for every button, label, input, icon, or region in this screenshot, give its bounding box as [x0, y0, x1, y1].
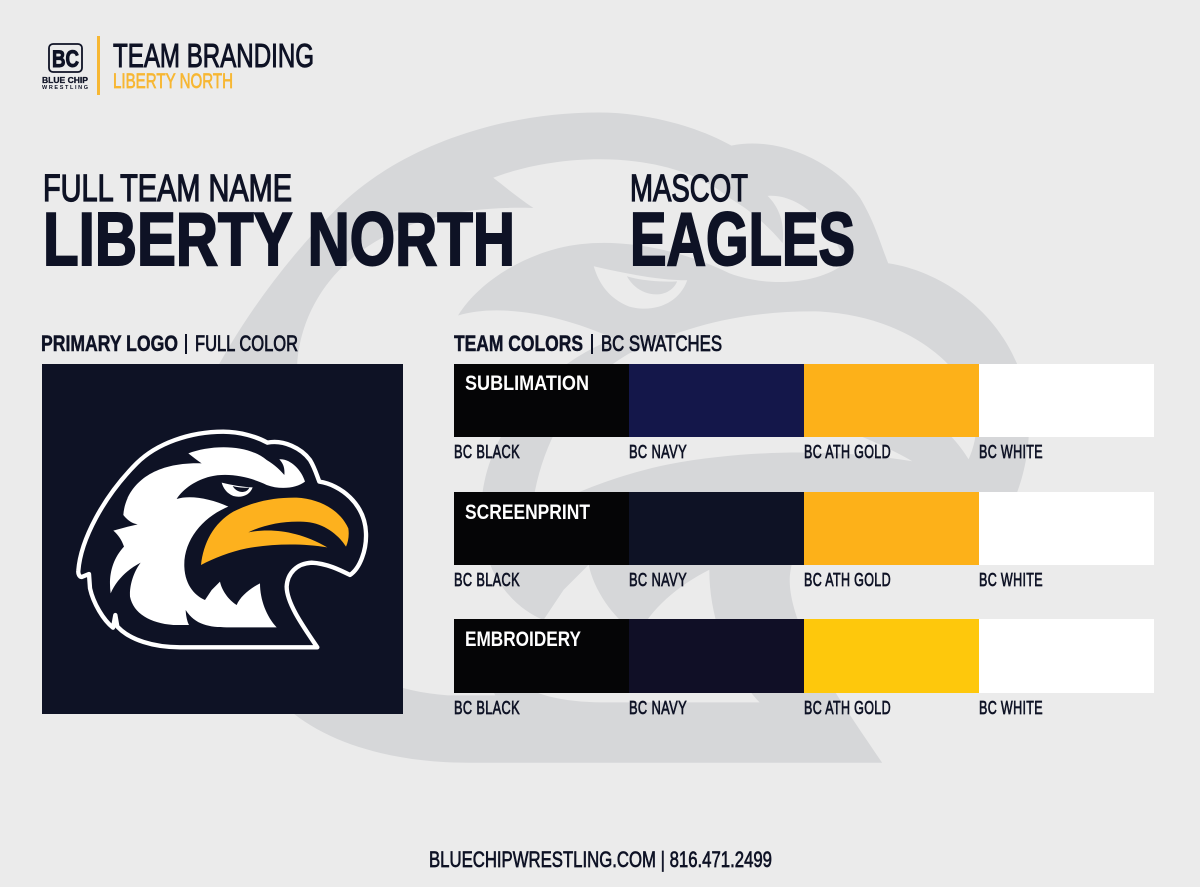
mascot value: EAGLES [630, 197, 855, 281]
primary logo heading [41, 331, 298, 356]
panel: screenprint swatches: BC BLACK [454, 570, 520, 590]
primary logo heading: FULL COLOR [195, 331, 298, 356]
team colors heading: TEAM COLORS [454, 331, 583, 356]
panel: embroidery swatches: BC BLACK [454, 698, 520, 718]
team colors heading [454, 331, 722, 356]
header: Blue Chip Wrestling logo: WRESTLING [42, 85, 88, 91]
panel: screenprint swatches: BC WHITE [979, 570, 1043, 590]
panel: screenprint swatches: BC ATH GOLD [804, 570, 891, 590]
panel: sublimation swatches: SUBLIMATION [465, 372, 589, 395]
panel: embroidery swatches: BC WHITE [979, 698, 1043, 718]
panel: sublimation swatches: BC BLACK [454, 442, 520, 462]
header: Blue Chip Wrestling logo: BC [52, 46, 79, 73]
panel: embroidery swatches: BC ATH GOLD [804, 698, 891, 718]
header: Blue Chip Wrestling logo: BLUE CHIP [42, 75, 88, 85]
primary logo heading: PRIMARY LOGO [41, 331, 178, 356]
full team name label: FULL TEAM NAME [43, 168, 292, 210]
panel: screenprint swatches [454, 492, 1154, 590]
panel: sublimation swatches: BC NAVY [629, 442, 687, 462]
watermark: eagle head [161, 112, 1029, 763]
footer contact line: BLUECHIPWRESTLING.COM | 816.471.2499 [429, 847, 772, 872]
header: Blue Chip Wrestling logo [42, 44, 88, 91]
header divider [97, 36, 100, 95]
mascot label: MASCOT [630, 168, 748, 210]
panel: embroidery swatches: EMBROIDERY [465, 628, 581, 651]
panel: sublimation swatches: BC WHITE [979, 442, 1043, 462]
panel: sublimation swatches: BC ATH GOLD [804, 442, 891, 462]
header subtitle: LIBERTY NORTH [113, 70, 233, 93]
panel: screenprint swatches: BC NAVY [629, 570, 687, 590]
panel: embroidery swatches: BC NAVY [629, 698, 687, 718]
team colors heading: BC SWATCHES [601, 331, 722, 356]
full team name value: LIBERTY NORTH [43, 197, 515, 281]
header title: TEAM BRANDING [113, 37, 314, 74]
panel: screenprint swatches: SCREENPRINT [465, 501, 590, 524]
panel: embroidery swatches [454, 619, 1154, 718]
icon: eagle head logo [78, 432, 366, 647]
panel: sublimation swatches [454, 364, 1154, 462]
panel: primary logo [42, 364, 403, 714]
